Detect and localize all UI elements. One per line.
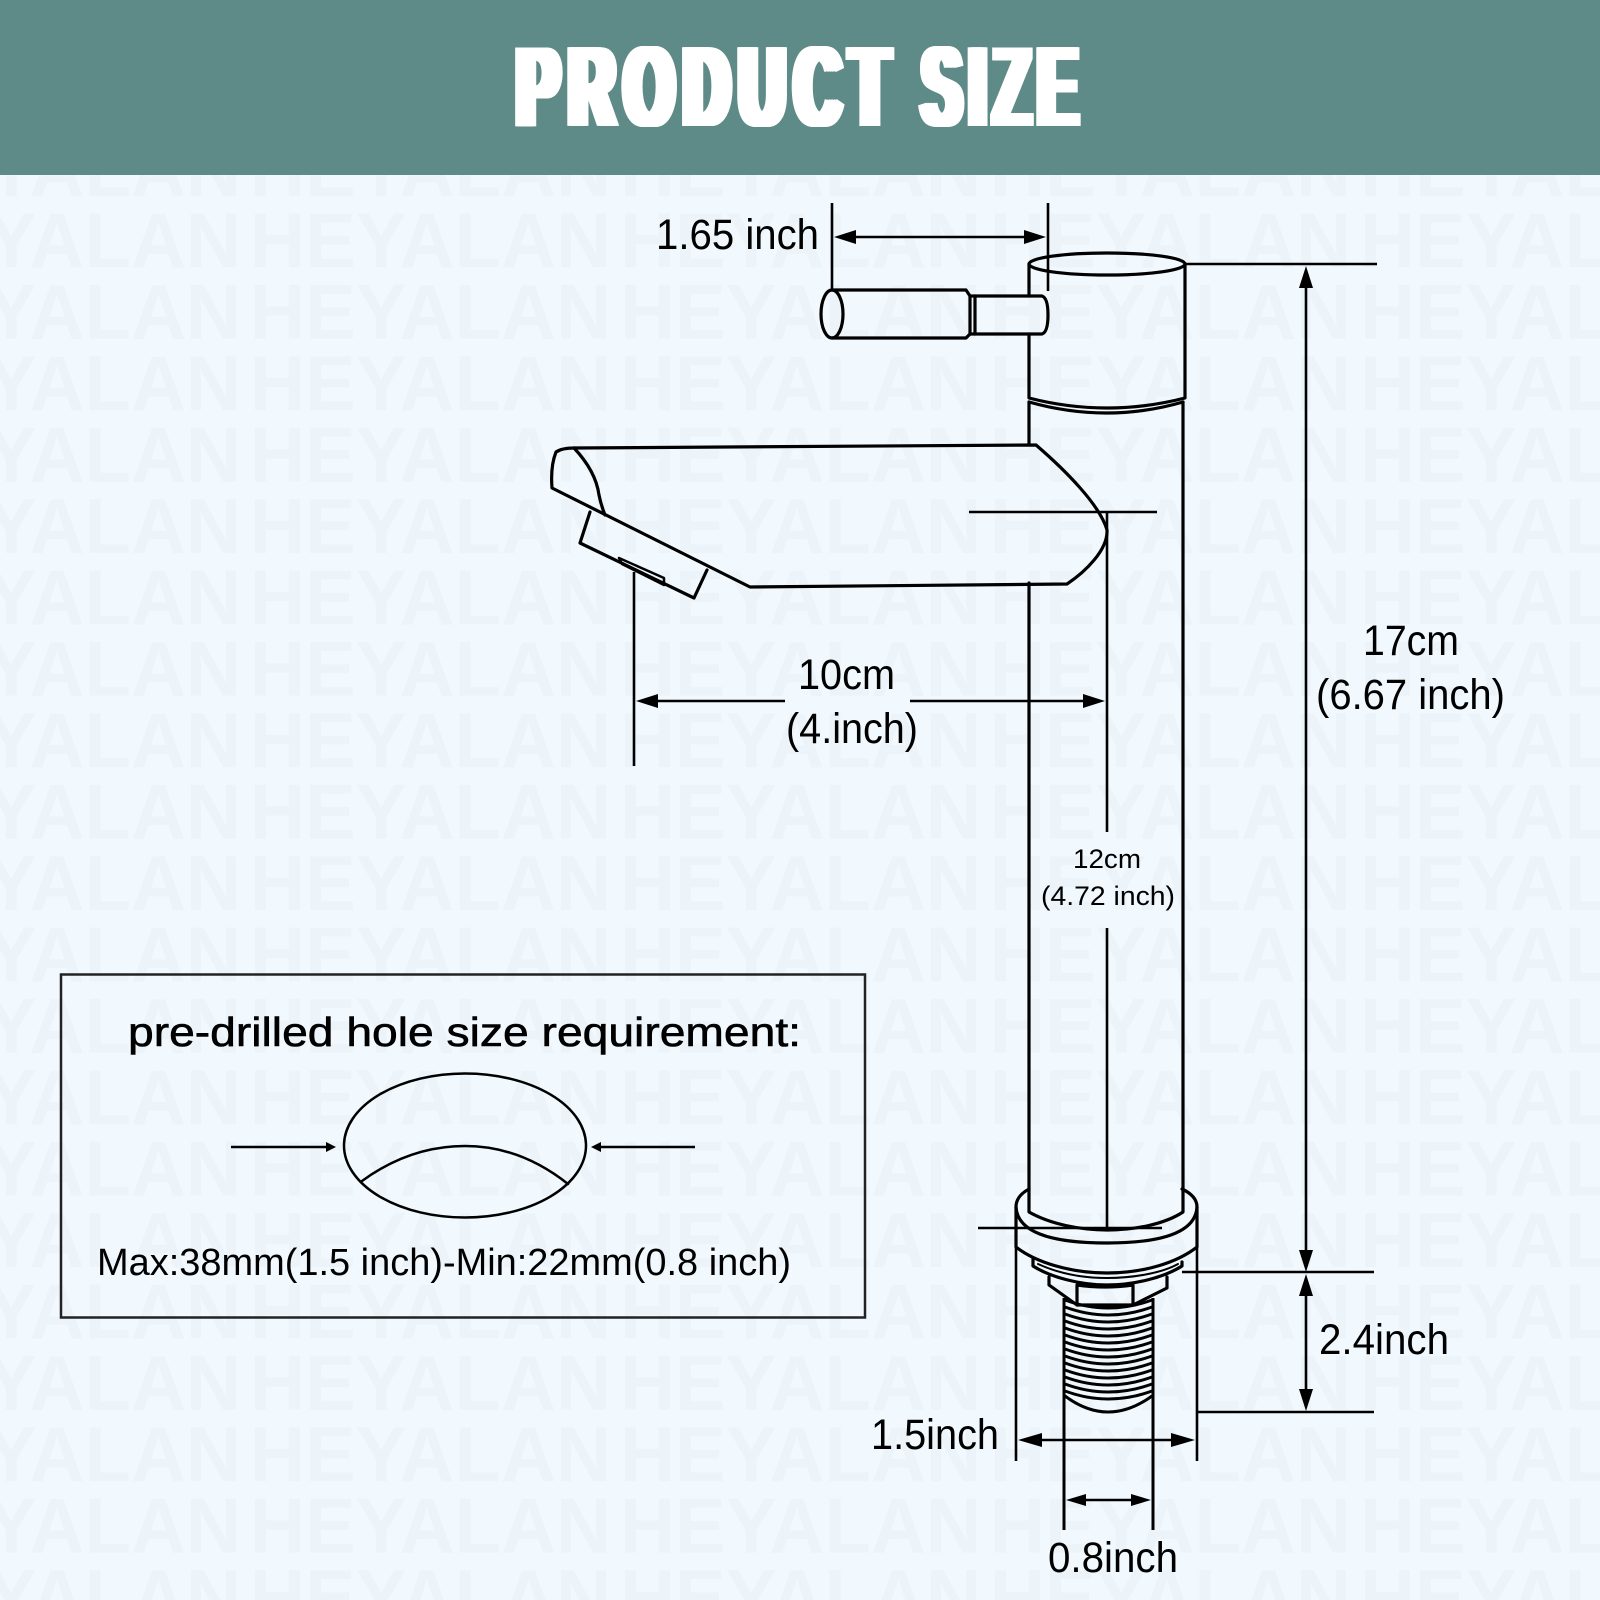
hole size range: Max:38mm(1.5 inch)-Min:22mm(0.8 inch) bbox=[97, 1242, 791, 1284]
faucet line drawing bbox=[552, 253, 1197, 1412]
dimension: 17cm height bbox=[1185, 264, 1505, 1272]
dimension: 0.8inch shank: 0.8inch bbox=[1048, 1534, 1178, 1582]
dimension: 1.65 inch: 1.65 inch bbox=[656, 211, 819, 259]
panel heading: pre-drilled hole size requirement: bbox=[128, 1009, 801, 1055]
faucet handle bbox=[821, 290, 1048, 338]
dimension: 2.4inch shank bbox=[1182, 1272, 1449, 1412]
dimension: 1.65 inch bbox=[656, 203, 1048, 291]
faucet spout bbox=[552, 445, 1107, 587]
dimension: 10cm reach: (4.inch) bbox=[786, 705, 918, 753]
dimension: 1.5inch base bbox=[871, 1207, 1197, 1461]
dimension: 0.8inch shank bbox=[1048, 1298, 1178, 1582]
dimension: 17cm height: (6.67 inch) bbox=[1316, 671, 1505, 719]
dimension: 17cm height: 17cm bbox=[1363, 617, 1459, 665]
faucet base flange bbox=[1016, 1189, 1197, 1273]
faucet aerator bbox=[580, 512, 707, 598]
faucet tube bbox=[1029, 402, 1183, 1230]
header banner bbox=[0, 0, 1600, 175]
faucet body upper cap bbox=[1029, 253, 1185, 413]
faucet threaded shank bbox=[1065, 1300, 1152, 1412]
dimension: 12cm spout height: (4.72 inch) bbox=[1041, 881, 1175, 911]
title bbox=[515, 24, 1085, 150]
faucet washer and nut bbox=[1033, 1258, 1182, 1305]
dimension: 10cm reach: 10cm bbox=[798, 651, 895, 699]
title: PRODUCT bbox=[516, 24, 899, 150]
dimension: 10cm reach bbox=[634, 572, 1105, 766]
dimension: 2.4inch shank: 2.4inch bbox=[1319, 1316, 1449, 1364]
dimension: 12cm spout height: 12cm bbox=[1073, 844, 1141, 874]
dimension: 12cm spout height bbox=[969, 512, 1175, 1228]
title: SIZE bbox=[922, 24, 1085, 150]
dimension: 1.5inch base: 1.5inch bbox=[871, 1411, 999, 1459]
hole diagram bbox=[231, 1074, 695, 1218]
panel: pre-drilled hole size bbox=[61, 974, 865, 1318]
